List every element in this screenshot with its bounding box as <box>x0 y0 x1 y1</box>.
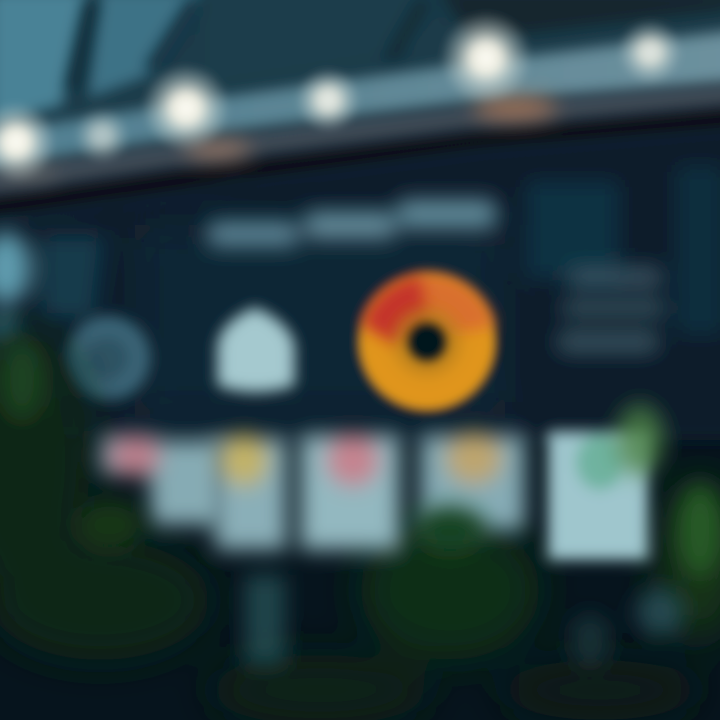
string lights <box>0 12 682 182</box>
icon: clock circle <box>66 316 150 400</box>
foliage front <box>0 340 720 576</box>
card 1 <box>100 435 222 525</box>
foliage back <box>0 330 720 720</box>
card 2 <box>215 434 287 550</box>
card 3 <box>300 434 400 550</box>
upper structure <box>0 0 720 240</box>
heading <box>208 200 496 246</box>
chart: donut <box>359 274 495 410</box>
card 5 <box>548 432 648 560</box>
warm reflections <box>2 96 557 179</box>
right text block <box>558 268 666 352</box>
lower blurred posts <box>245 575 684 666</box>
card 4 <box>420 432 525 530</box>
panel: dashboard board <box>0 130 720 440</box>
left wall elements <box>0 232 105 350</box>
roof beam <box>0 30 720 222</box>
icon: house <box>218 308 294 392</box>
cards row <box>100 432 648 560</box>
